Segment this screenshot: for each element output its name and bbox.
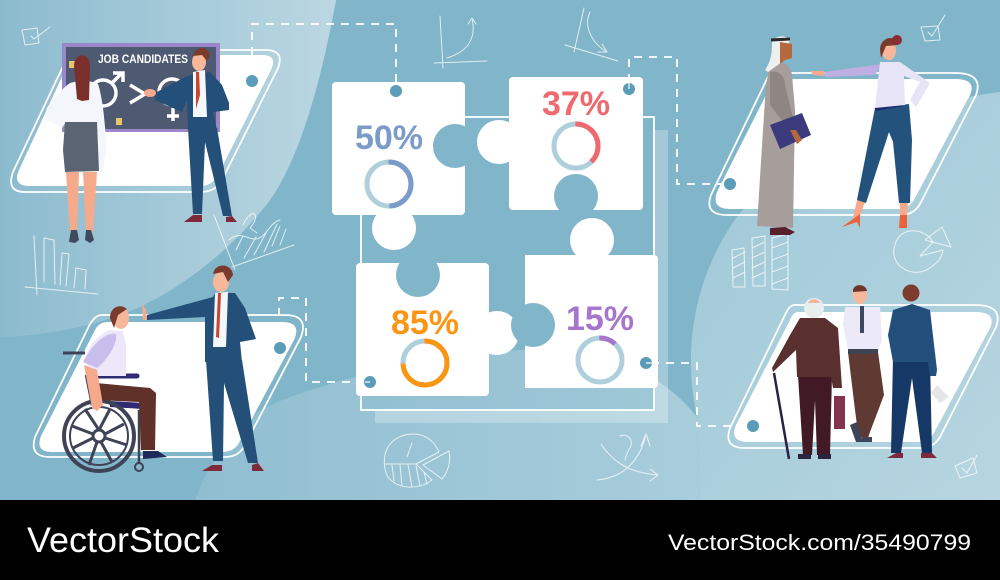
person: man in white thobe with folder <box>757 36 811 235</box>
doodle: rising curve <box>434 16 487 68</box>
doodle: question with arrows <box>597 434 658 481</box>
person: pointing woman with glasses <box>810 35 930 228</box>
frame behind puzzle <box>360 116 668 423</box>
doodle: pie chart <box>894 227 951 272</box>
panel: bottom-right card <box>728 305 998 448</box>
sketch doodles <box>22 8 977 487</box>
donut: 85% <box>403 341 447 385</box>
briefcase <box>834 396 845 429</box>
value: 15%: 15% <box>566 300 634 338</box>
person: elderly man with cane <box>772 298 845 459</box>
board heading: JOB CANDIDATES <box>98 54 188 66</box>
person: man in suit from behind <box>887 284 949 458</box>
male and female symbols <box>90 73 185 121</box>
person: thinking man <box>843 285 884 442</box>
person: man in wheelchair <box>63 306 167 471</box>
doodle: bar sketch <box>25 236 98 295</box>
panel: bottom-left card <box>34 315 303 457</box>
puzzle piece: 37% <box>477 77 643 218</box>
puzzle piece: 50% <box>332 82 477 250</box>
panel: top-right card <box>709 73 978 215</box>
person: man in suit raising hand <box>142 265 264 471</box>
value: 50%: 50% <box>355 119 423 157</box>
doodle: divided pie <box>384 434 450 487</box>
panel connector dots <box>246 75 759 432</box>
footer bar <box>0 500 1000 580</box>
puzzle piece: 15% <box>511 218 658 388</box>
value: 85%: 85% <box>391 304 459 342</box>
doodle: falling curve <box>565 8 618 61</box>
doodle: top-left checkbox <box>22 27 50 45</box>
value: 37%: 37% <box>542 85 610 123</box>
folder <box>770 113 811 149</box>
donut: 15% <box>578 338 622 382</box>
doodle: top-right checkbox <box>921 15 945 41</box>
donut: 50% <box>367 162 411 206</box>
doodle: bottom-right checkbox <box>955 455 977 478</box>
doodle: area chart <box>214 214 294 270</box>
donut: 37% <box>554 124 598 168</box>
doodle: striped bars <box>732 234 788 290</box>
footer logo text: VectorStock <box>27 521 220 560</box>
person: woman seen from behind <box>46 56 106 243</box>
panel: top-left card <box>11 50 280 192</box>
cane <box>774 373 789 459</box>
footer image id: VectorStock.com/35490799 <box>668 530 971 555</box>
puzzle piece: 85% <box>356 253 519 396</box>
wheelchair <box>63 353 143 471</box>
person: man in suit at board <box>144 48 237 222</box>
chalkboard: job candidates <box>62 43 220 132</box>
dashed connectors <box>252 24 750 426</box>
